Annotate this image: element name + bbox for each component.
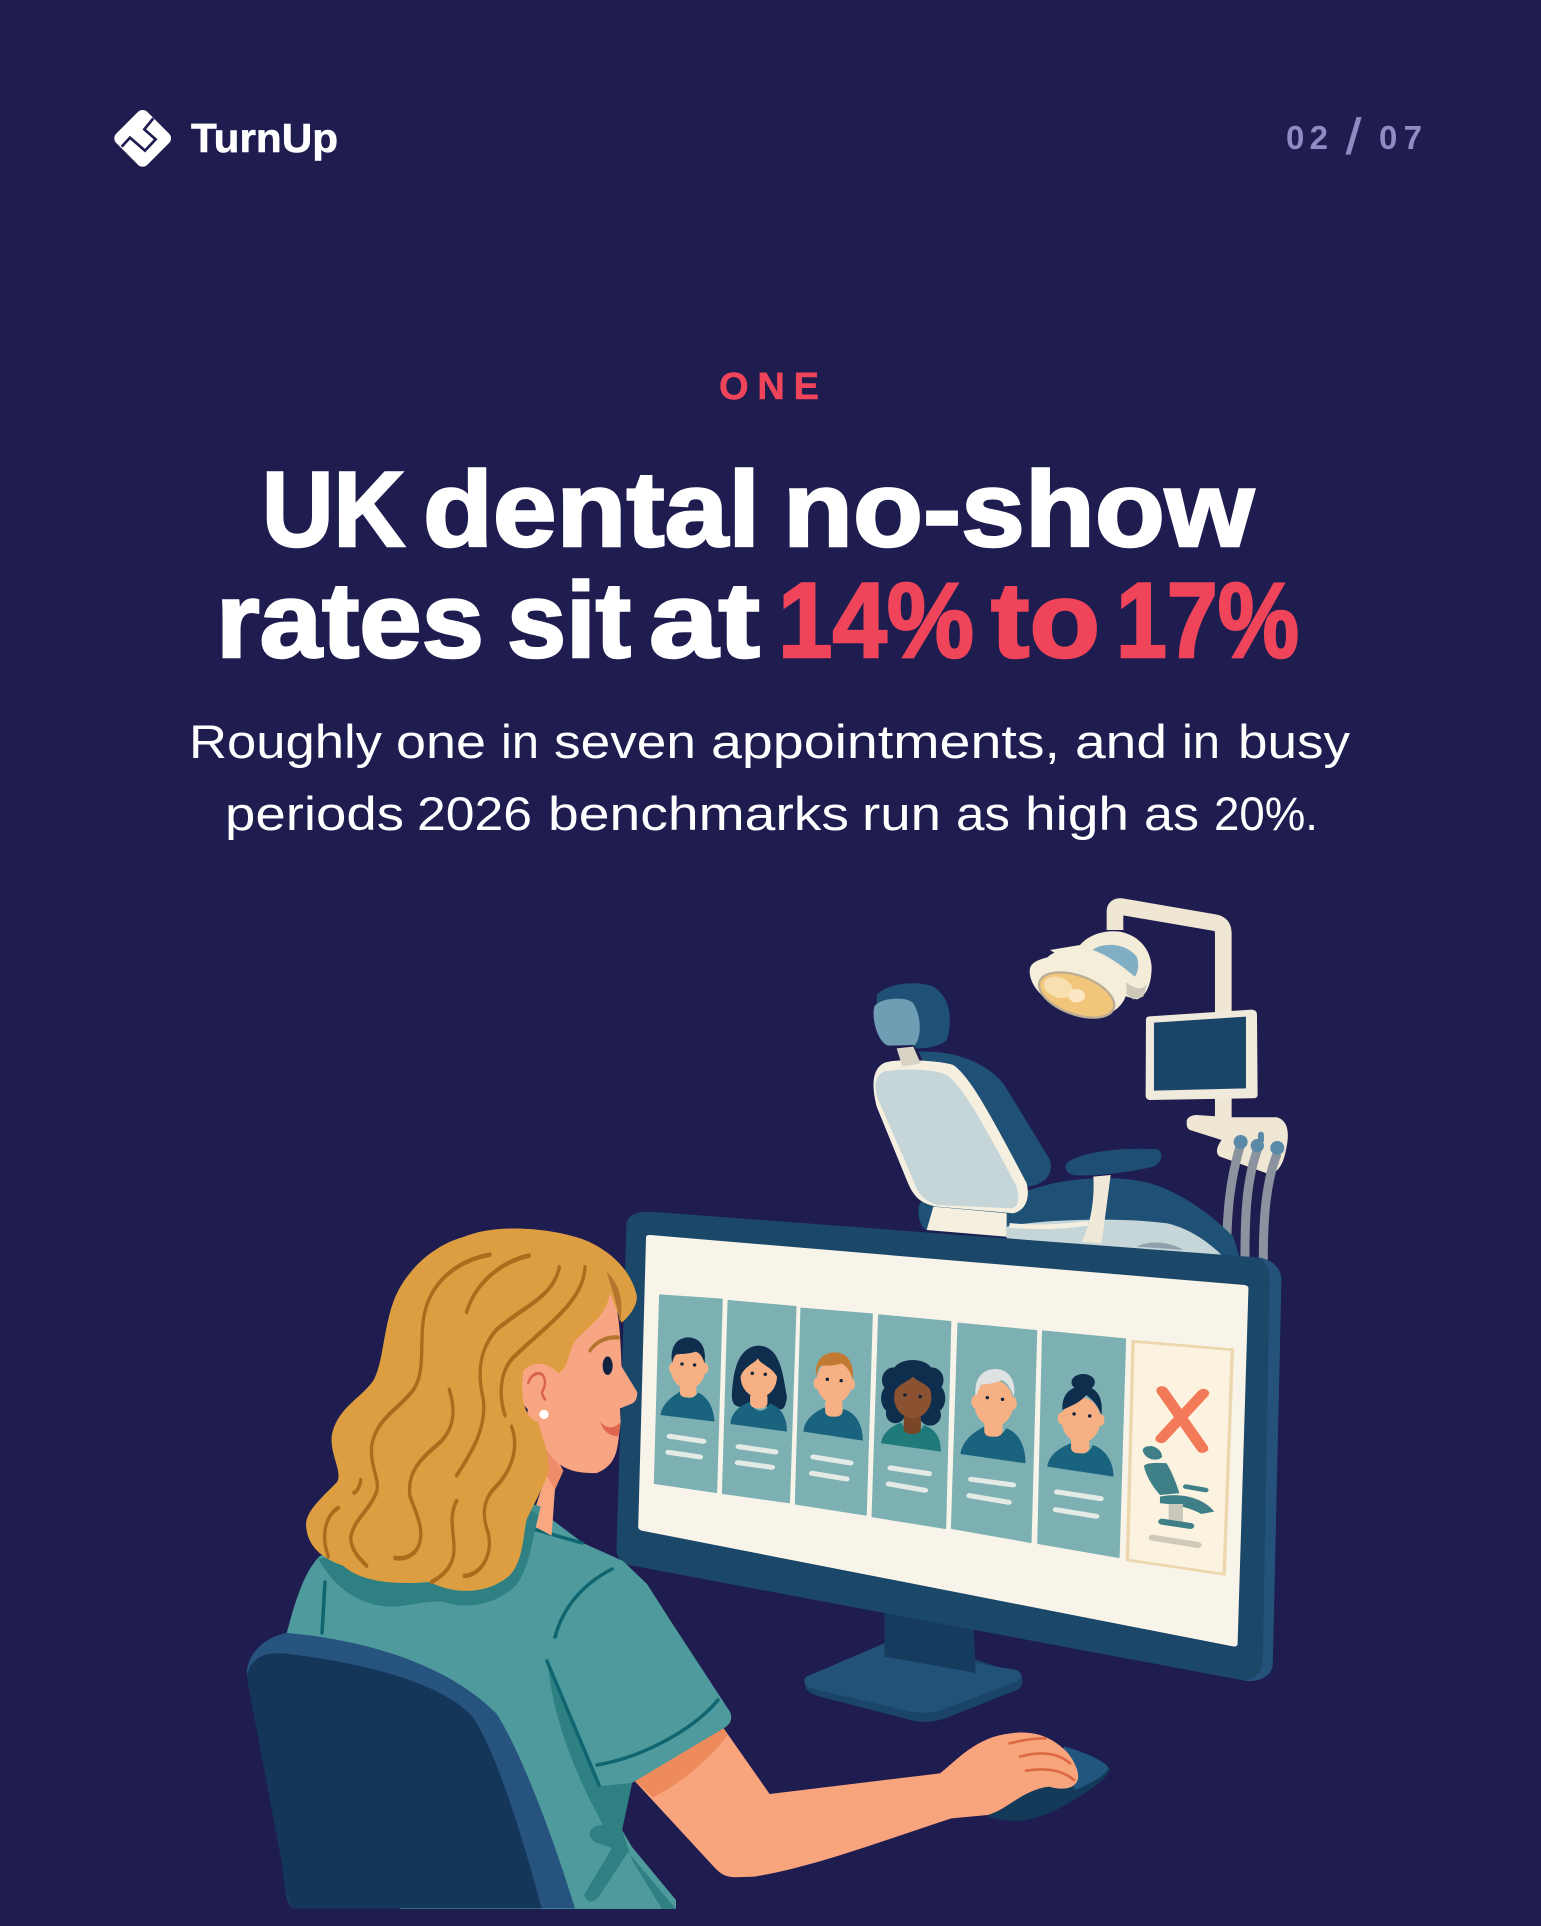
chair headrest	[874, 983, 950, 1067]
highlighted range: to	[991, 560, 1100, 680]
ear	[519, 1358, 551, 1412]
neck	[530, 1432, 563, 1536]
highlighted range: 14%	[778, 560, 974, 680]
subtitle: seven	[554, 715, 696, 768]
hair strands	[325, 1255, 585, 1582]
subtitle: in	[1182, 715, 1220, 768]
subtitle: and	[1075, 715, 1167, 768]
title: sit	[507, 560, 631, 680]
patient card 3	[796, 1308, 872, 1515]
monitor frame	[616, 1212, 1281, 1681]
monitor stand	[804, 1600, 1022, 1722]
arm	[634, 1728, 1078, 1877]
subtitle: Roughly	[189, 715, 383, 768]
illustration: dental chair and lamp	[873, 907, 1288, 1260]
subtitle: high	[1025, 787, 1129, 840]
patient card 5	[952, 1323, 1036, 1542]
eye and brow	[590, 1337, 618, 1375]
title: at	[649, 560, 760, 680]
title: UK	[262, 449, 405, 569]
subtitle: 2026	[417, 787, 532, 840]
title: no-show	[783, 449, 1255, 569]
fingers	[1010, 1738, 1074, 1780]
wall screen	[1146, 1010, 1258, 1100]
illustration: receptionist torso in teal scrubs	[285, 1503, 731, 1909]
page counter: /	[1346, 109, 1361, 165]
monitor screen	[638, 1235, 1248, 1647]
wordmark: TurnUp	[191, 115, 338, 161]
hair shadow on shoulders	[318, 1506, 538, 1607]
subtitle	[189, 715, 1351, 840]
illustration: receptionist head and hair	[306, 1228, 637, 1607]
subtitle: as	[1144, 787, 1199, 840]
chair seat	[918, 1178, 1240, 1258]
patient card 1	[655, 1295, 722, 1492]
subtitle: benchmarks	[548, 787, 849, 840]
title: dental	[423, 449, 760, 569]
subtitle: periods	[225, 787, 404, 840]
unit tray and hoses	[1187, 1093, 1288, 1260]
subtitle: as	[956, 787, 1010, 840]
title	[216, 449, 1299, 680]
icon: TurnUp diamond logo	[112, 107, 174, 169]
highlighted range	[778, 560, 1299, 680]
page counter: 02	[1286, 119, 1328, 156]
chair armrest	[1065, 1149, 1161, 1243]
face	[527, 1283, 637, 1473]
subtitle: one	[396, 715, 486, 768]
lips	[600, 1421, 621, 1436]
lamp arm	[1115, 907, 1223, 1013]
patient card 2	[723, 1301, 796, 1503]
subtitle: run	[862, 787, 941, 840]
page counter: 07	[1379, 119, 1422, 156]
highlighted range: 17%	[1116, 560, 1299, 680]
title: rates	[216, 560, 484, 680]
subtitle: 20%.	[1214, 787, 1318, 840]
patient card 6	[1038, 1331, 1125, 1557]
illustration: computer monitor	[616, 1212, 1281, 1722]
collar	[523, 1503, 541, 1530]
mouse	[988, 1747, 1109, 1821]
illustration: office chair back	[247, 1633, 575, 1908]
dental lamp	[1030, 931, 1152, 1027]
subtitle: busy	[1238, 715, 1351, 768]
header: brand logo and wordmark	[112, 107, 338, 169]
section label: ONE	[719, 366, 819, 408]
illustration: forearm, hand and mouse	[634, 1728, 1109, 1877]
subtitle: appointments,	[711, 715, 1060, 768]
subtitle: in	[501, 715, 539, 768]
patient card 4	[872, 1315, 950, 1528]
page counter	[1286, 109, 1422, 165]
chair backrest	[873, 1051, 1051, 1213]
hair	[306, 1228, 637, 1591]
empty slot card with red cross and chair	[1127, 1341, 1232, 1574]
earring	[539, 1410, 549, 1419]
